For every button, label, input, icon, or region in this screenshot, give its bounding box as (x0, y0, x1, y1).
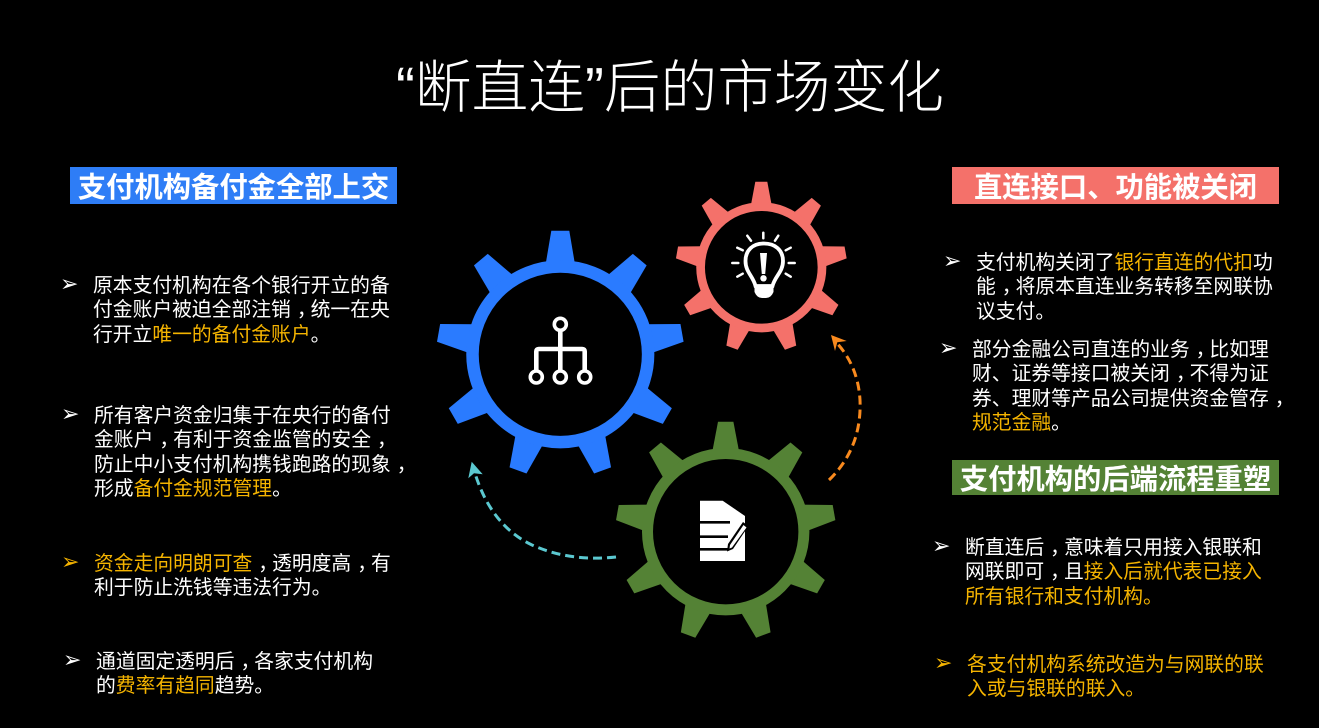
text block: fund safety: 所有客户资金归集于在央行的备付 (94, 399, 391, 428)
text block: connect once: 网联即可 ，且接入后就代表已接入 (965, 555, 1262, 584)
text block: accounts cancelled: ➢ (60, 272, 78, 297)
text block: agency debit closed (943, 246, 1273, 324)
heading: back-end process rebuilt: 支付机构的后端流程重塑 (960, 457, 1271, 498)
text block: transparency: 资金走向明朗可查 ，透明度高 ，有 (94, 547, 391, 576)
heading: direct interfaces closed: 直连接口、功能被关闭 (974, 165, 1257, 206)
text block: system rework: ➢ (934, 651, 952, 676)
text block: finance companies: 规范金融。 (972, 406, 1071, 435)
icon: light bulb with exclamation (732, 233, 795, 298)
text block: accounts cancelled: 原本支付机构在各个银行开立的备 (93, 269, 390, 298)
text block: transparency: 利于防止洗钱等违法行为。 (94, 571, 331, 600)
text block: fund safety (61, 399, 417, 501)
arrow: orange dashed, green gear to red gear (829, 335, 860, 480)
text block: connect once: 断直连后 ，意味着只用接入银联和 (965, 531, 1262, 560)
text block: fee convergence (63, 645, 373, 698)
text block: fee convergence: 通道固定透明后 ，各家支付机构 (96, 645, 373, 674)
text block: fee convergence: 的费率有趋同趋势。 (96, 669, 274, 698)
text block: fund safety: ➢ (61, 402, 79, 427)
text block: system rework (934, 648, 1264, 701)
text block: accounts cancelled: 行开立唯一的备付金账户。 (93, 318, 330, 347)
text block: connect once (932, 531, 1262, 609)
text block: agency debit closed: ➢ (943, 249, 961, 274)
text block: finance companies: 财、证券等接口被关闭 ，不得为证 (972, 357, 1269, 386)
text block: agency debit closed: 议支付。 (976, 295, 1055, 324)
text block: finance companies: ➢ (939, 336, 957, 361)
icon: red gear (675, 182, 847, 351)
text block: system rework: 各支付机构系统改造为与网联的联 (967, 648, 1264, 677)
icon: network hierarchy (530, 318, 591, 383)
panel: left column, reserve funds (60, 165, 417, 698)
icon: document with pen (700, 501, 748, 561)
text block: connect once: 所有银行和支付机构。 (965, 580, 1163, 609)
text block: transparency (61, 547, 391, 600)
icon: green gear (615, 422, 836, 640)
text block: finance companies (939, 333, 1295, 435)
text block: finance companies: 券、理财等产品公司提供资金管存 ， (972, 382, 1295, 411)
title: “断直连”后的市场变化 (396, 57, 944, 120)
text block: agency debit closed: 支付机构关闭了银行直连的代扣功 (976, 246, 1273, 275)
text block: agency debit closed: 能 ，将原本直连业务转移至网联协 (976, 270, 1273, 299)
heading: reserve funds handed in: 支付机构备付金全部上交 (78, 165, 389, 206)
icon: blue gear (436, 231, 685, 476)
text block: accounts cancelled (60, 269, 390, 347)
text block: system rework: 入或与银联的联入。 (967, 672, 1145, 701)
text block: transparency: ➢ (61, 550, 79, 575)
text block: fee convergence: ➢ (63, 648, 81, 673)
panel: right column, interfaces and back-end process (932, 165, 1295, 701)
arrow: teal dashed, green gear to blue gear (468, 462, 616, 558)
text block: finance companies: 部分金融公司直连的业务 ，比如理 (972, 333, 1269, 362)
text block: accounts cancelled: 付金账户被迫全部注销 ，统一在央 (93, 293, 390, 322)
text block: fund safety: 形成备付金规范管理。 (94, 472, 292, 501)
text block: fund safety: 防止中小支付机构携钱跑路的现象 ， (94, 448, 417, 477)
text block: fund safety: 金账户 ，有利于资金监管的安全 ， (94, 423, 397, 452)
text block: connect once: ➢ (932, 534, 950, 559)
